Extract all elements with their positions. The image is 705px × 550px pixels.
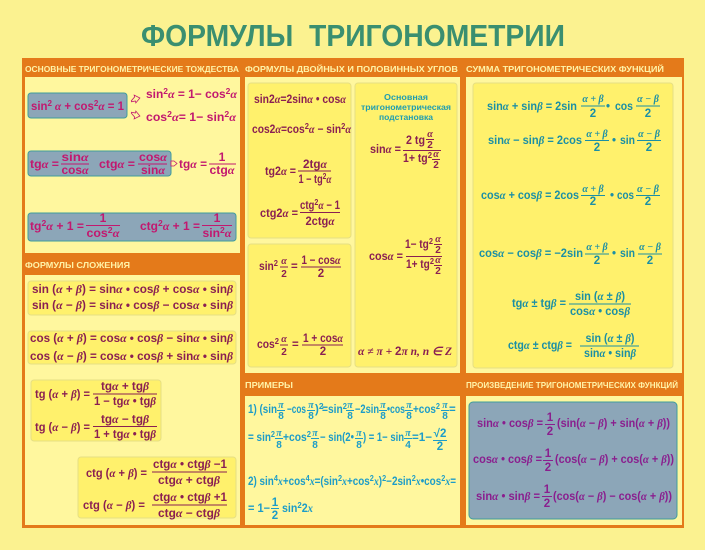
- example 2, second line: [248, 497, 313, 522]
- formula: difference of cosines: α + β: [586, 242, 609, 253]
- panel: product of trigonometric functions: [466, 379, 682, 525]
- formula box: tangent and cotangent: cosα: [62, 163, 89, 177]
- heading: double and half angles: ФОРМУЛЫ ДВОЙНЫХ И ПОЛОВИННЫХ УГЛОВ: [245, 63, 458, 74]
- example 1, second line: π: [276, 428, 282, 439]
- formula: tangent reciprocal: tgα =: [179, 157, 207, 171]
- formula: sine substitution: α: [427, 129, 433, 140]
- icon: arrow down: [130, 110, 141, 120]
- example 1, first line: =sin2: [322, 401, 347, 416]
- formula box: double angle: 2ctgα: [306, 216, 335, 228]
- formula: sum of cosines: 2: [645, 196, 651, 208]
- formula: difference of sines: sin: [620, 135, 635, 147]
- example 1, first line: 8: [308, 411, 314, 422]
- example 1, second line: π: [356, 428, 362, 439]
- example 1, second line: = sin2: [248, 429, 275, 444]
- formula: cosine substitution: 2: [435, 266, 441, 277]
- formula box: one plus tangent squared: cos2α: [86, 225, 120, 240]
- formula box: Pythagorean identity: sin2 α + cos2α = 1: [31, 98, 124, 113]
- formula: difference of sines: α + β: [586, 129, 609, 140]
- icon: small arrow: [171, 161, 177, 166]
- formula box: half angle: =: [291, 261, 298, 273]
- formula: difference of cosines: •: [612, 248, 616, 260]
- formula box: tangent of sum: tg (α − β) =: [35, 422, 90, 434]
- formula: difference of cosines: 2: [594, 255, 600, 267]
- example 1, first line: π: [406, 400, 412, 411]
- example 1, first line: π: [442, 400, 448, 411]
- formula: sine times sine: 1: [544, 484, 551, 496]
- formula box: cosine of sum: cos (α + β) = cosα • cosβ − sinα • sinβ: [30, 331, 234, 345]
- formula box: tangent of sum: tgα + tgβ: [101, 381, 149, 393]
- formula box: one plus tangent squared: 1: [214, 211, 221, 225]
- formula: sum of cosines: •: [610, 190, 614, 202]
- heading: basic identities: ОСНОВНЫЕ ТРИГОНОМЕТРИЧЕСКИЕ ТОЖДЕСТВА: [25, 64, 239, 74]
- formula: sum of tangents: cosα • cosβ: [570, 306, 630, 318]
- formula: cosine substitution: 1− tg2: [405, 236, 433, 251]
- formula box: tangent of sum: 1 − tgα • tgβ: [94, 396, 156, 408]
- formula: sum of sines: cos: [615, 101, 633, 113]
- subheading: universal substitution: [361, 92, 451, 122]
- example 1, first line: 8: [278, 411, 284, 422]
- example 1, first line: •cos: [387, 404, 405, 416]
- formula box: tangent and cotangent: sinα: [141, 163, 165, 177]
- example 1, first line: 8: [380, 411, 386, 422]
- subheading: universal substitution: Основная: [384, 92, 428, 102]
- formula: difference of cosines: cosα − cosβ = −2sin: [479, 248, 583, 260]
- formula: cosine substitution: α: [435, 234, 441, 245]
- formula box: half angle: [248, 244, 351, 367]
- formula box: one plus tangent squared: [28, 211, 236, 241]
- formula: sum of tangents: [512, 291, 631, 318]
- example 1, first line: π: [347, 400, 353, 411]
- formula box: tangent and cotangent: [28, 150, 171, 177]
- formula box: sine of sum: sin (α − β) = sinα • cosβ − cosα • sinβ: [32, 298, 234, 312]
- formula box: tangent and cotangent: cosα: [139, 150, 167, 164]
- formula box: cotangent of sum: ctgα + ctgβ: [158, 475, 220, 487]
- formula box: cotangent of sum: ctgα − ctgβ: [158, 508, 220, 520]
- formula box: half angle: α: [281, 256, 287, 267]
- formula: sine times cosine: [477, 412, 670, 438]
- example 1, second line: ) = 1− sin: [363, 432, 404, 444]
- example 1, first line: π: [278, 400, 284, 411]
- example 1, second line: 8: [312, 440, 318, 451]
- formula box: half angle: 1 − cosα: [302, 255, 341, 267]
- example 2, second line: sin22x: [282, 500, 313, 515]
- example 1, first line: π: [380, 400, 386, 411]
- example 2, second line: 2: [272, 510, 278, 522]
- condition on alpha: α ≠ π + 2π n, n ∈ Z: [358, 346, 452, 358]
- formula: sine times cosine: (sin(α − β) + sin(α + β)): [557, 418, 670, 430]
- formula: sum of tangents: tgα ± tgβ =: [512, 298, 566, 310]
- example 1, second line: 8: [276, 440, 282, 451]
- formula box: half angle: =: [292, 339, 299, 351]
- formula: sine times sine: 2: [544, 498, 550, 510]
- example 1, first line: 8: [406, 411, 412, 422]
- formula: sum of sines: α − β: [637, 94, 660, 105]
- formula box: tangent and cotangent: sinα: [62, 150, 89, 164]
- formula: cosine times cosine: cosα • cosβ =: [473, 454, 542, 466]
- formula: sum of cosines: α − β: [637, 184, 660, 195]
- formula: difference of cosines: [479, 242, 662, 267]
- formula: sum of cotangents: [508, 333, 639, 360]
- example 1, second line: 4: [405, 440, 411, 451]
- formula: sine substitution: α: [433, 149, 439, 160]
- formula: tangent reciprocal: [179, 150, 236, 177]
- formula box: universal substitution: [355, 83, 457, 367]
- formula box: tangent and cotangent: ctgα =: [99, 157, 135, 171]
- formula: sum of cotangents: sinα • sinβ: [584, 348, 636, 360]
- example 2, second line: 1: [272, 497, 279, 509]
- formula: sum of cosines: cos: [617, 190, 634, 202]
- panel: double and half angle formulas: [245, 63, 460, 373]
- subheading: universal substitution: подстановка: [379, 112, 433, 122]
- formula: cosine times cosine: 2: [545, 462, 551, 474]
- formula: sin squared: sin2α = 1− cos2α: [146, 86, 237, 101]
- formula box: tangent of sum: 1 + tgα • tgβ: [94, 429, 156, 441]
- title: ФОРМУЛЫ ТРИГОНОМЕТРИИ: [141, 18, 565, 53]
- formula: sine times cosine: 1: [547, 412, 554, 424]
- formula box: half angle: 2: [281, 269, 287, 280]
- formula: difference of sines: [488, 129, 661, 154]
- formula: sum of sines: [487, 94, 660, 120]
- formula box: double angle: cos2α=cos2α − sin2α: [252, 121, 352, 136]
- formula: sum of sines: sinα + sinβ = 2sin: [487, 101, 577, 113]
- heading: addition formulas: ФОРМУЛЫ СЛОЖЕНИЯ: [25, 260, 130, 270]
- formula: sine substitution: 2: [427, 140, 433, 151]
- example 1, second line: [248, 427, 447, 453]
- formula: difference of cosines: sin: [620, 248, 635, 260]
- formula: difference of sines: sinα − sinβ = 2cos: [488, 135, 582, 147]
- example 1, second line: =1−: [412, 432, 432, 444]
- formula: sum of cotangents: ctgα ± ctgβ =: [508, 340, 572, 352]
- formula box: half angle: 2: [281, 347, 287, 358]
- formula: cosine times cosine: [473, 448, 674, 474]
- formula: sine times cosine: sinα • cosβ =: [477, 418, 543, 430]
- formula box: sine of sum: sin (α + β) = sinα • cosβ + cosα • sinβ: [32, 282, 234, 296]
- example 1, first line: 8: [347, 411, 353, 422]
- panel: sum of trigonometric functions: [466, 63, 682, 373]
- example 1, second line: π: [405, 428, 411, 439]
- heading: examples: ПРИМЕРЫ: [245, 380, 293, 390]
- formula box: cotangent of sum: ctgα • ctgβ −1: [153, 459, 228, 471]
- formula box: half angle: α: [281, 334, 287, 345]
- example 1, first line: )2: [315, 401, 324, 416]
- formula box: tangent of sum: tgα − tgβ: [101, 414, 149, 426]
- formula: cosine substitution: cosα =: [369, 251, 403, 263]
- formula: sum of cotangents: sin (α ± β): [586, 333, 635, 345]
- formula box: cotangent of sum: ctgα • ctgβ +1: [153, 492, 228, 504]
- formula: sum of sines: 2: [590, 108, 596, 120]
- heading: sum of functions: СУММА ТРИГОНОМЕТРИЧЕСКИХ ФУНКЦИЙ: [466, 63, 664, 74]
- formula box: double angle: ctg2α =: [260, 208, 298, 220]
- formula: sine substitution: [370, 129, 441, 171]
- icon: arrow up: [130, 94, 141, 104]
- formula box: double angle: 1 − tg2α: [298, 171, 332, 186]
- example 2, second line: = 1−: [248, 503, 270, 515]
- example 1, first line: =: [449, 404, 456, 416]
- formula: sum of sines: α + β: [582, 94, 605, 105]
- example 1, first line: 8: [442, 411, 448, 422]
- example 2, first line: 2) sin4x+cos4x=(sin2x+cos2x)2−2sin2x•cos2x=: [248, 473, 456, 488]
- formula: sum of sines: •: [606, 101, 610, 113]
- formula box: tangent of sum: tg (α + β) =: [35, 389, 90, 401]
- example 1, second line: π: [312, 428, 318, 439]
- formula box: one plus tangent squared: 1: [100, 211, 107, 225]
- formula: sum of cosines: α + β: [582, 184, 605, 195]
- example 1, second line: 2: [437, 441, 443, 453]
- example 1, first line: −cos: [287, 404, 306, 416]
- formula box: half angle: sin2: [259, 258, 278, 273]
- formula: sum of cosines: [481, 184, 660, 208]
- formula: sum of sines: 2: [645, 108, 651, 120]
- formula box: double angle: tg2α =: [265, 166, 296, 178]
- formula: sine substitution: 2 tg: [406, 135, 425, 147]
- panel: addition formulas: [25, 260, 240, 525]
- formula box: cotangent of sum: [78, 457, 236, 520]
- formula box: double angle: 2tgα: [303, 159, 328, 171]
- formula box: double angle: sin2α=2sinα • cosα: [254, 94, 347, 106]
- panel: basic identities: [25, 64, 240, 253]
- subheading: universal substitution: тригонометрическая: [361, 102, 451, 112]
- formula box: cosine of sum: cos (α − β) = cosα • cosβ + sinα • sinβ: [30, 349, 234, 363]
- heading: product of functions: ПРОИЗВЕДЕНИЕ ТРИГОНОМЕТРИЧЕСКИХ ФУНКЦИЙ: [466, 379, 678, 390]
- example 1, first line: π: [308, 400, 314, 411]
- formula: sine times sine: [476, 484, 672, 510]
- example 1, second line: − sin(2•: [320, 432, 354, 444]
- formula: sum of cosines: 2: [590, 196, 596, 208]
- formula: cosine substitution: α: [435, 255, 441, 266]
- formula: difference of cosines: α − β: [639, 242, 662, 253]
- formula: cosine substitution: 1+ tg2: [406, 256, 434, 271]
- formula box: double angle: [248, 83, 352, 238]
- formula: tangent reciprocal: 1: [219, 150, 226, 164]
- formula: sine substitution: sinα =: [370, 144, 401, 156]
- formula box: one plus tangent squared: ctg2α + 1 =: [140, 218, 200, 233]
- formula box: half angle: 1 + cosα: [303, 333, 344, 345]
- formula box: tangent of sum: [31, 380, 161, 441]
- formula: difference of sines: •: [612, 135, 616, 147]
- example 1, first line: [248, 400, 456, 422]
- formula: cosine times cosine: (cos(α − β) + cos(α + β)): [555, 454, 674, 466]
- panel: examples: [245, 380, 460, 525]
- formula box: sine of sum: [28, 281, 236, 315]
- formula box: half angle: cos2: [257, 336, 279, 351]
- formula box: half angle: 2: [318, 268, 324, 280]
- formula: difference of sines: 2: [594, 142, 600, 154]
- formula box: cotangent of sum: ctg (α + β) =: [86, 468, 147, 480]
- formula: sum of tangents: sin (α ± β): [575, 291, 625, 303]
- formula: sine times sine: (cos(α − β) − cos(α + β)): [553, 491, 672, 503]
- example 1, first line: −2sin: [355, 404, 379, 416]
- formula: tangent reciprocal: ctgα: [210, 163, 235, 177]
- formula box: Pythagorean identity: [28, 93, 127, 118]
- example 1, second line: +cos2: [283, 429, 311, 444]
- formula: cos squared: cos2α= 1− sin2α: [146, 109, 236, 124]
- formula: sine times sine: sinα • sinβ =: [476, 491, 540, 503]
- example 1, first line: 1) (sin: [248, 404, 277, 416]
- example 1, second line: √2: [434, 427, 446, 440]
- formula: cosine times cosine: 1: [545, 448, 552, 460]
- formula: sine substitution: 1+ tg2: [403, 150, 432, 165]
- formula: difference of sines: 2: [646, 142, 652, 154]
- example 1, first line: +cos2: [413, 401, 440, 416]
- formula box: one plus tangent squared: sin2α: [202, 225, 232, 240]
- formula: sine substitution: 2: [433, 160, 439, 171]
- formula: cosine substitution: 2: [435, 245, 441, 256]
- formula box: double angle: ctg2α − 1: [300, 197, 340, 212]
- formula: sine times cosine: 2: [547, 426, 553, 438]
- example 1, second line: 8: [356, 440, 362, 451]
- formula box: cotangent of sum: ctg (α − β) =: [83, 500, 145, 512]
- formula box: one plus tangent squared: tg2α + 1 =: [30, 218, 84, 233]
- formula: cosine substitution: [369, 234, 442, 277]
- formula: sum of cosines: cosα + cosβ = 2cos: [481, 190, 579, 202]
- formula box: cosine of sum: [28, 331, 236, 364]
- formula: difference of cosines: 2: [647, 255, 653, 267]
- formula box: tangent and cotangent: tgα =: [30, 157, 59, 171]
- formula box: half angle: 2: [320, 346, 326, 358]
- formula: difference of sines: α − β: [638, 129, 661, 140]
